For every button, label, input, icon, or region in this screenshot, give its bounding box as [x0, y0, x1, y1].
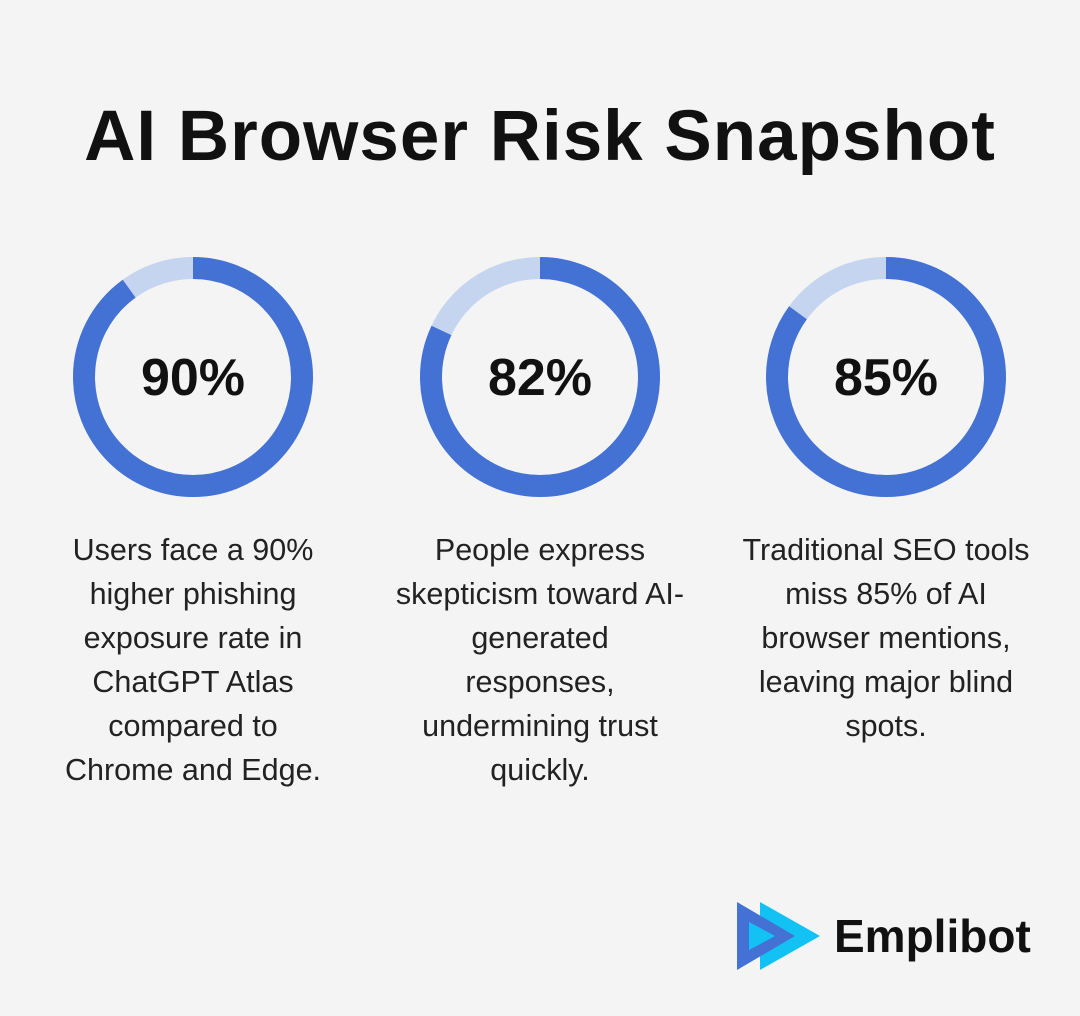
donut: 85% [766, 257, 1006, 497]
text: 82%: responses, [465, 665, 615, 699]
text: 82%: skepticism toward AI- [396, 577, 684, 611]
text: 82%: quickly. [490, 753, 590, 787]
text: 85%: browser mentions, [761, 621, 1011, 655]
logo text: Emplibot [834, 910, 1031, 962]
text: 90%: Chrome and Edge. [65, 753, 321, 787]
donut: 90%: 90% [141, 349, 245, 407]
title: AI Browser Risk Snapshot [84, 97, 996, 176]
text: 82%: People express [435, 533, 645, 567]
text: 82% [396, 533, 684, 787]
text: 85%: leaving major blind [759, 665, 1013, 699]
donut: 82% [420, 257, 660, 497]
text: 90%: higher phishing [90, 577, 296, 611]
text: 85%: miss 85% of AI [785, 577, 987, 611]
text: 85%: spots. [845, 709, 927, 743]
text: 82%: undermining trust [422, 709, 658, 743]
donut: 82%: 82% [488, 349, 592, 407]
text: 90%: compared to [108, 709, 278, 743]
logo [737, 902, 1031, 970]
text: 85%: Traditional SEO tools [742, 533, 1030, 567]
text: 90%: Users face a 90% [73, 533, 313, 567]
text: 82%: generated [471, 621, 609, 655]
text: 90% [65, 533, 321, 787]
donut: 85%: 85% [834, 349, 938, 407]
text: 90%: ChatGPT Atlas [92, 665, 294, 699]
donut: 90% [73, 257, 313, 497]
icon: logo triangles [737, 902, 820, 970]
text: 90%: exposure rate in [84, 621, 302, 655]
text: 85% [742, 533, 1030, 743]
